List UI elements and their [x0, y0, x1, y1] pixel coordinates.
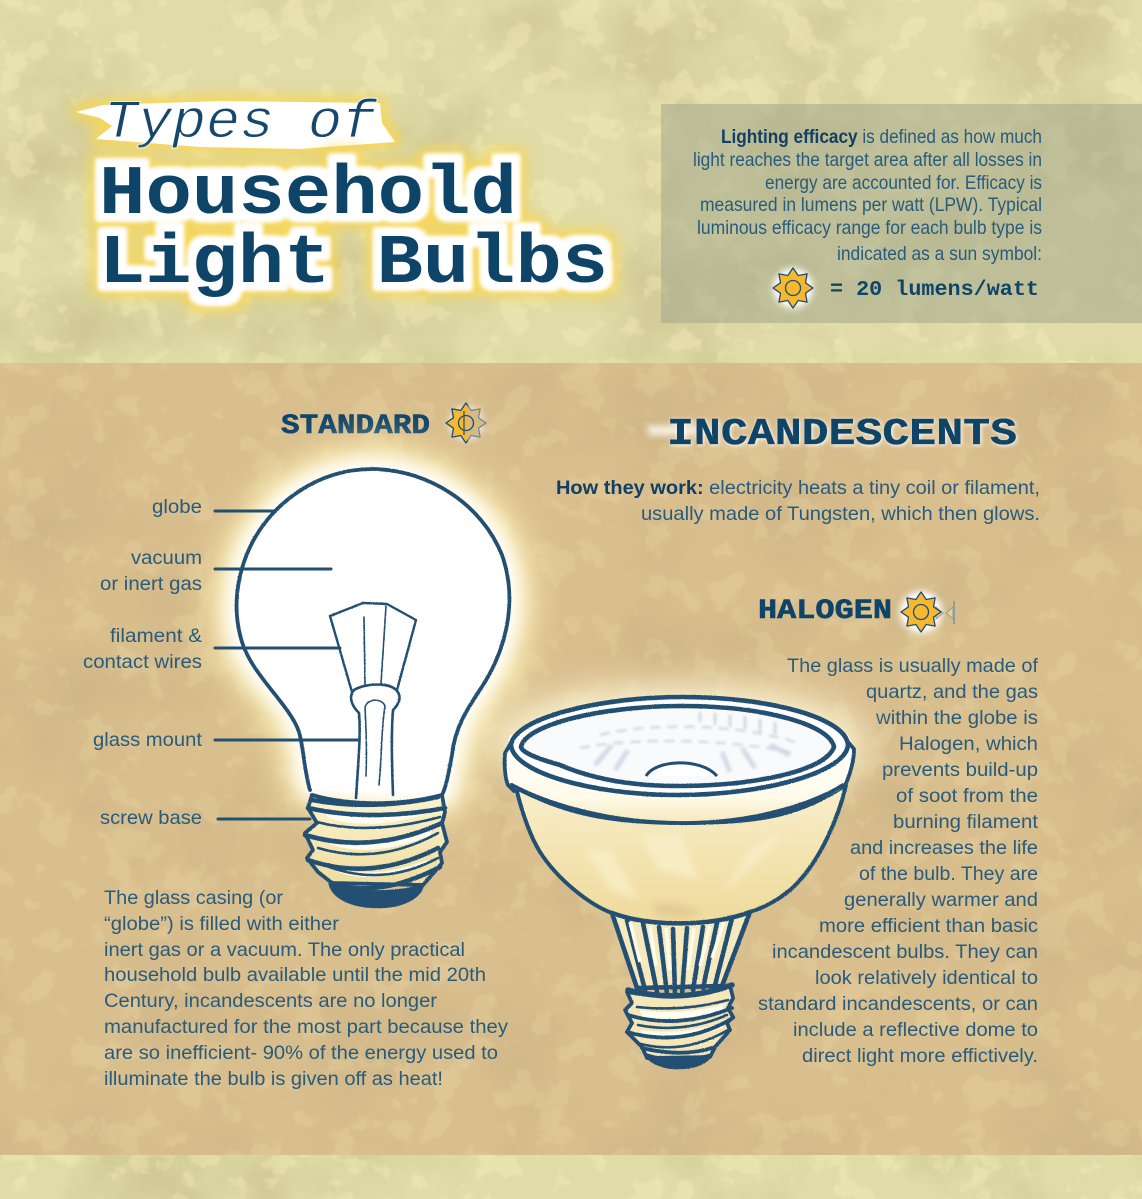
text: standard description: manufactured for the most part because they — [104, 1016, 508, 1038]
text: halogen description — [758, 655, 1039, 1067]
text: halogen description: within the globe is — [875, 707, 1038, 729]
icon: sun with partial second sun — [900, 591, 954, 633]
text: how they work — [556, 477, 1040, 525]
icon: half sun — [446, 403, 486, 443]
text: halogen description: direct light more effictively. — [802, 1045, 1038, 1067]
labels: standard bulb parts — [83, 496, 358, 829]
labels: standard bulb parts: filament & — [110, 625, 202, 647]
text: standard description: are so inefficient- 90% of the energy used to — [104, 1042, 498, 1064]
text: halogen description: of the bulb. They are — [859, 863, 1038, 885]
labels: standard bulb parts: vacuum — [131, 547, 202, 569]
text: how they work: How they work: electricity heats a tiny coil or filament, — [556, 477, 1040, 499]
bulb glow — [236, 469, 509, 795]
title line: Household Light Bulbs — [99, 156, 608, 304]
text: halogen description: quartz, and the gas — [866, 681, 1038, 703]
title line: Household Light Bulbs: Light Bulbs — [99, 225, 608, 304]
efficacy definition text: Lighting efficacy is defined as how much — [721, 126, 1042, 148]
outer rim and reflector — [511, 697, 848, 795]
text: standard description: household bulb available until the mid 20th — [104, 964, 486, 986]
halogen glow — [495, 687, 865, 803]
text: halogen description: standard incandescents, or can — [758, 993, 1038, 1015]
heading: incandescents: INCANDESCENTS — [667, 413, 1017, 456]
reflector body — [516, 785, 846, 923]
heading: standard: STANDARD — [281, 411, 430, 442]
efficacy definition text — [693, 126, 1042, 265]
text: standard description: The glass casing (or — [104, 887, 284, 909]
text: halogen description: and increases the life — [850, 837, 1038, 859]
legend text: = 20 lumens/watt — [830, 279, 1039, 302]
text: halogen description: The glass is usually made of — [787, 655, 1039, 677]
filament and contact wires — [330, 603, 416, 692]
text: how they work: usually made of Tungsten, which then glows. — [641, 503, 1040, 525]
heading: halogen — [758, 591, 954, 633]
labels: standard bulb parts: globe — [152, 496, 202, 518]
text: halogen description: include a reflective dome to — [793, 1019, 1038, 1041]
screw base — [305, 795, 447, 907]
labels: standard bulb parts: screw base — [100, 807, 202, 829]
efficacy definition text: luminous efficacy range for each bulb type is — [697, 217, 1042, 239]
glass mount — [351, 684, 400, 798]
labels: standard bulb parts: glass mount — [93, 729, 203, 751]
title line: Types of: Types of — [104, 93, 378, 154]
labels: standard bulb parts: or inert gas — [100, 573, 202, 595]
text: halogen description: burning filament — [893, 811, 1039, 833]
efficacy definition text: indicated as a sun symbol: — [837, 243, 1042, 265]
globe — [237, 469, 509, 795]
text: halogen description: Halogen, which — [899, 733, 1038, 755]
title — [76, 93, 608, 304]
title brush stroke — [76, 101, 395, 149]
efficacy definition text: light reaches the target area after all losses in — [693, 149, 1042, 171]
rim — [505, 697, 854, 823]
text: halogen description: look relatively identical to — [815, 967, 1038, 989]
title line: Household Light Bulbs: Household — [99, 156, 517, 235]
text: standard description: inert gas or a vacuum. The only practical — [104, 939, 465, 961]
text: halogen description: prevents build-up — [882, 759, 1038, 781]
icon: sun symbol legend — [773, 268, 813, 308]
text: standard description — [104, 887, 508, 1090]
screw base — [625, 985, 733, 1068]
text: halogen description: more efficient than basic — [819, 915, 1038, 937]
illustration: standard bulb — [236, 469, 509, 907]
text: halogen description: generally warmer and — [844, 889, 1038, 911]
text: standard description: illuminate the bulb is given off as heat! — [104, 1068, 443, 1090]
text: standard description: Century, incandescents are no longer — [104, 990, 438, 1012]
text: halogen description: incandescent bulbs. They can — [772, 941, 1038, 963]
text: standard description: “globe”) is filled with either — [104, 913, 340, 935]
text: halogen description: of soot from the — [896, 785, 1038, 807]
heading: standard — [281, 403, 486, 443]
panel: lighting efficacy — [661, 104, 1142, 323]
illustration: halogen bulb — [495, 687, 865, 1068]
efficacy definition text: energy are accounted for. Efficacy is — [765, 172, 1042, 194]
efficacy definition text: measured in lumens per watt (LPW). Typical — [700, 194, 1042, 216]
reflector detail — [580, 712, 795, 776]
labels: standard bulb parts: contact wires — [83, 651, 202, 673]
neck with ribs — [612, 912, 750, 995]
heading: halogen: HALOGEN — [758, 596, 892, 627]
